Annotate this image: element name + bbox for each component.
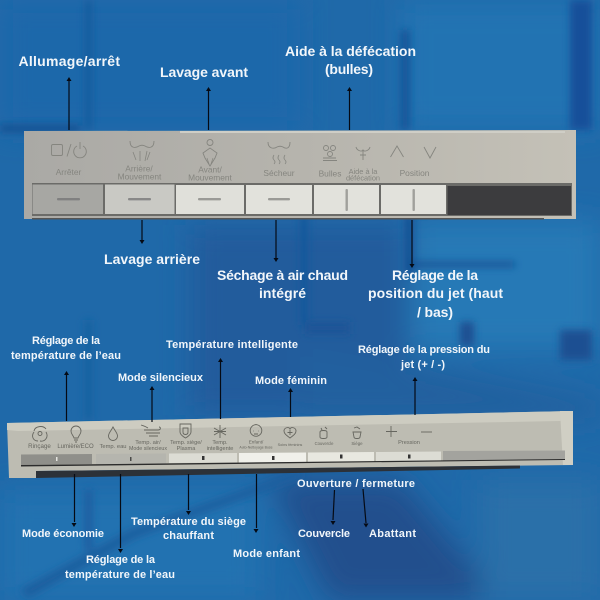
label: hot air drying: intégré [259, 285, 306, 301]
arrow: front wash [206, 87, 211, 130]
label: water temperature bottom: température de l’eau [65, 569, 175, 581]
label: hot air drying: Séchage à air chaud [217, 267, 348, 283]
label: rear wash: Lavage arrière [104, 251, 200, 267]
strip labels: Enfant/ [249, 440, 264, 444]
label: child mode: Mode enfant [233, 548, 300, 560]
panel: bottom control strip [7, 411, 573, 478]
strip labels: Sécheur [263, 168, 295, 178]
label: heated seat temperature: Température du siège [131, 516, 246, 528]
strip labels: Arrêter [56, 167, 82, 177]
strip labels: Temp. eau [99, 444, 127, 450]
icon: rinse [33, 427, 47, 441]
arrow: rear wash [140, 220, 144, 244]
strip labels: Mouvement [118, 172, 162, 182]
arrow: water temp bottom [118, 474, 123, 553]
label: water temperature top [11, 335, 121, 362]
label: eco mode: Mode économie [22, 528, 104, 540]
strip labels: Mouvement [188, 172, 233, 182]
strip labels: Bulles [319, 168, 341, 178]
arrow: smart temperature [218, 358, 223, 419]
button: blank dark [448, 186, 571, 215]
strip labels: Lumière/ECO [57, 444, 94, 450]
icon: air [141, 425, 160, 436]
label: jet pressure: jet (+ / -) [400, 359, 445, 371]
arrow: seat cover [363, 489, 368, 528]
icon: drop [108, 427, 118, 441]
label: front wash: Lavage avant [160, 64, 248, 80]
button: position [381, 185, 446, 214]
icon: plus [386, 426, 397, 437]
icon: minus [421, 431, 432, 433]
strip labels: Temp. [212, 440, 228, 446]
label: defecation aid: Aide à la défécation [285, 43, 416, 59]
button: rear wash [105, 184, 174, 214]
label: lid: Couvercle [298, 528, 350, 540]
button: blank grey [443, 450, 565, 460]
button: bubbles [314, 185, 379, 214]
arrow: silent mode [150, 386, 154, 422]
icon: front wash [203, 140, 217, 166]
label: seat cover: Abattant [369, 528, 416, 540]
label: jet pressure [358, 344, 490, 371]
icon: seat [353, 427, 361, 438]
strip labels: Couvercle [315, 441, 334, 446]
label: hot air drying [217, 267, 348, 301]
strip labels: Position [400, 168, 430, 178]
button: front wash [176, 185, 244, 214]
button: seat temp [169, 453, 237, 463]
icon: heart plus [284, 428, 296, 438]
arrow: jet pressure [412, 377, 418, 415]
label: jet position: / bas) [417, 304, 453, 320]
label: defecation aid [285, 43, 416, 77]
strip labels [28, 440, 420, 452]
label: water temperature bottom [65, 554, 175, 581]
icon: chevron down [424, 147, 436, 158]
arrow: jet position [410, 220, 414, 268]
strip labels: Mode silencieux [129, 446, 167, 452]
icon: chevron up [390, 146, 404, 157]
strip labels: Siège [351, 441, 363, 446]
button: light ECO [96, 454, 166, 464]
strip labels: Soins féminins [278, 443, 302, 447]
strip labels: Temp. siège/ [170, 440, 202, 446]
label: jet position: Réglage de la [392, 267, 478, 283]
label: power: Allumage/arrêt [18, 53, 120, 69]
button: off [32, 184, 103, 214]
strip labels: intelligente [207, 446, 233, 452]
label: water temperature top: température de l’eau [11, 350, 121, 362]
label: open close: Ouverture / fermeture [297, 478, 415, 490]
arrow: feminine mode [288, 388, 293, 417]
button: seat [376, 452, 441, 462]
arrow: water temp top [64, 371, 69, 421]
icon: snow sun [214, 425, 226, 438]
arrow: dryer [274, 220, 278, 262]
strip labels [56, 164, 430, 182]
button: child mode [239, 452, 306, 462]
label: jet pressure: Réglage de la pression du [358, 344, 490, 356]
strip labels: Plasma [177, 446, 196, 452]
strip labels: Rinçage [28, 443, 51, 450]
strip labels: Pression [398, 440, 420, 446]
strip labels: Aide à la [349, 167, 378, 176]
button: rinse [21, 454, 92, 465]
arrow: eco mode [72, 474, 76, 527]
label: water temperature top: Réglage de la [32, 335, 101, 347]
button: dryer [246, 185, 312, 214]
icon: defecation aid [356, 147, 370, 160]
arrow: lid [330, 490, 336, 525]
label: water temperature bottom: Réglage de la [86, 554, 156, 566]
label: silent mode: Mode silencieux [118, 372, 204, 384]
label: heated seat temperature: chauffant [163, 530, 214, 542]
strip labels: Arrière/ [125, 164, 153, 174]
icon: rear wash [130, 141, 154, 161]
arrow: power [66, 77, 72, 130]
icon: bubbles [323, 146, 337, 160]
button shadow edge [21, 459, 565, 466]
strip labels: défécation [346, 174, 380, 182]
label: heated seat temperature [131, 516, 246, 542]
panel: top control strip [24, 130, 576, 220]
icon: child [250, 424, 262, 436]
label: feminine mode: Mode féminin [255, 375, 327, 387]
label: defecation aid: (bulles) [325, 61, 373, 77]
icon: lid [320, 427, 327, 438]
strip labels: Temp. air/ [135, 440, 161, 446]
strip labels: Avant/ [198, 164, 222, 174]
arrow: child mode [254, 474, 258, 533]
label: smart temperature: Température intelligente [166, 339, 298, 351]
arrow: seat temperature [186, 474, 191, 515]
button: lid [308, 452, 374, 462]
icon: power [52, 142, 86, 158]
icon: seat shield [180, 424, 191, 438]
strip labels: Auto-Nettoyage Buse [239, 446, 273, 450]
label: jet position [368, 267, 503, 320]
label: jet position: position du jet (haut [368, 285, 503, 301]
icon: dryer [268, 142, 290, 164]
arrow: bubbles [347, 87, 352, 130]
icon: bulb [71, 426, 81, 442]
